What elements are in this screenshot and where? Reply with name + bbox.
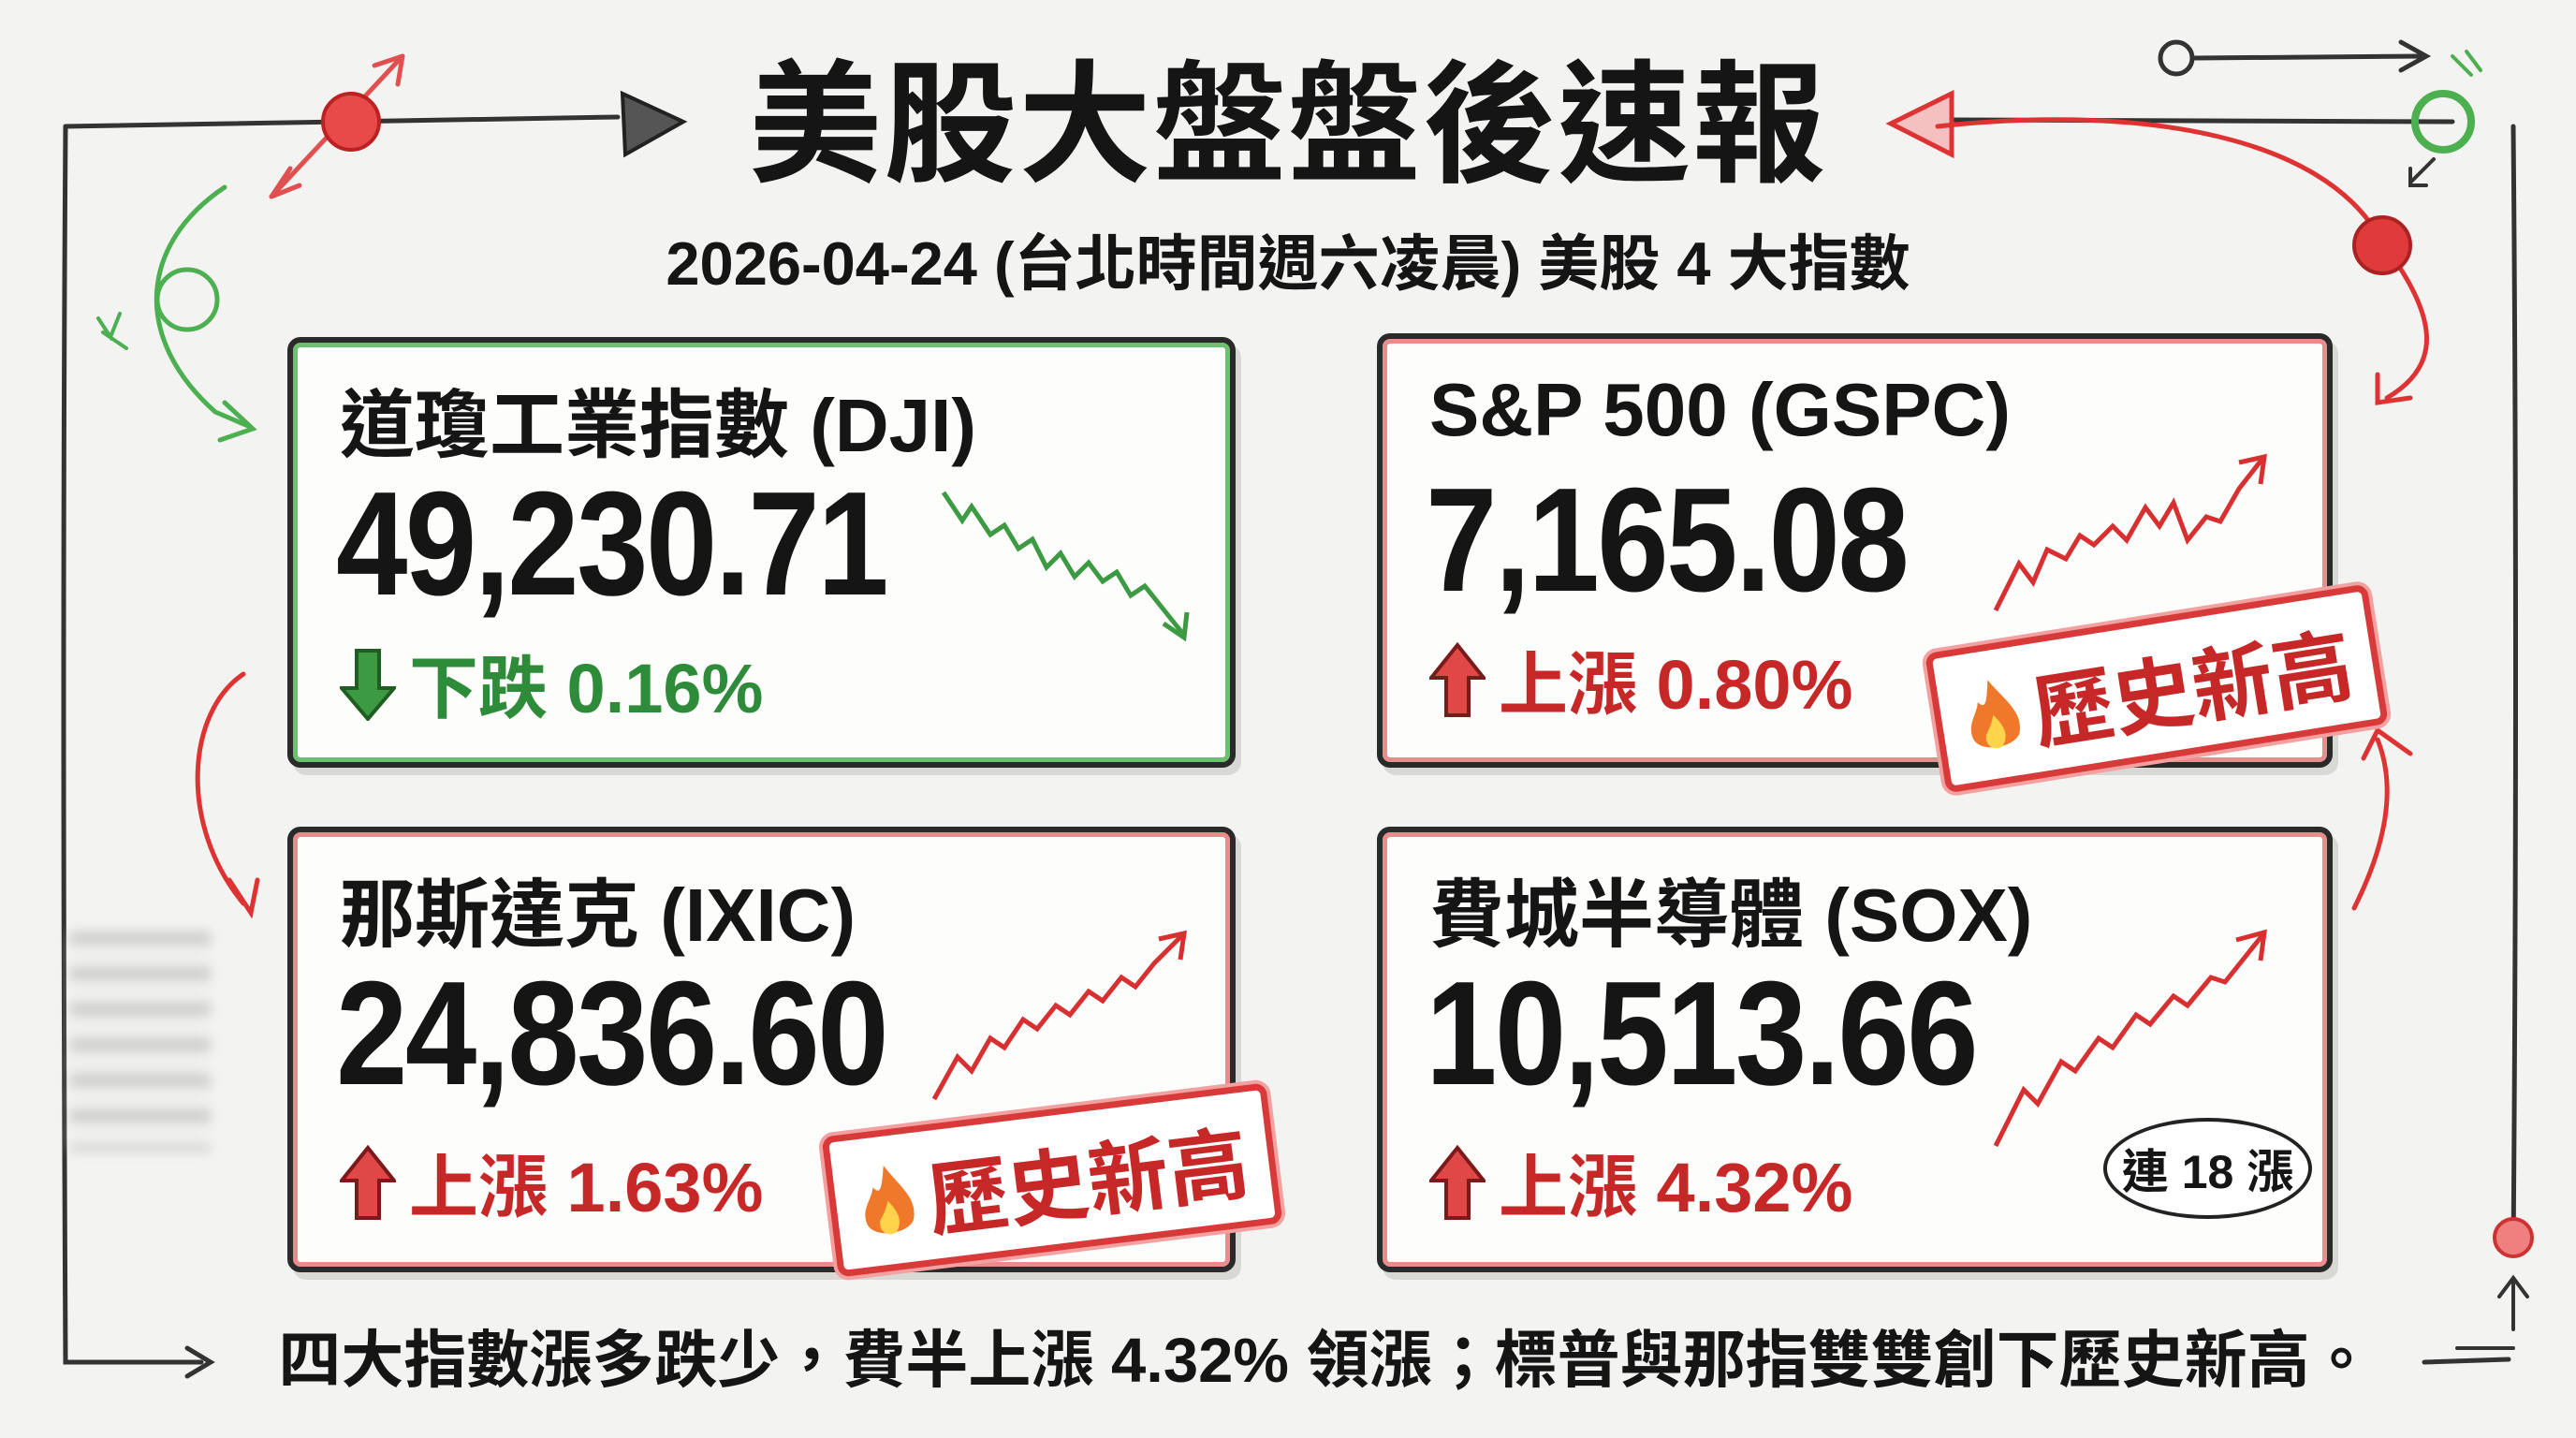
badge: SPX record high — [1925, 584, 2389, 793]
number SPX: 7,165.08 — [1426, 458, 1907, 623]
sparkline IXIC — [932, 931, 1187, 1101]
change IXIC: 上漲 1.63% — [409, 1149, 763, 1226]
sparkline SOX — [1994, 929, 2267, 1148]
badge: SPX record high: 歷史新高 — [2027, 622, 2359, 760]
heading DJI: 道瓊工業指數 (DJI) — [340, 384, 976, 467]
change SOX: 上漲 4.32% — [1499, 1149, 1852, 1226]
heading IXIC: 那斯達克 (IXIC) — [340, 873, 856, 957]
bottom summary: 四大指數漲多跌少，費半上漲 4.32% 領漲；標普與那指雙雙創下歷史新高。 — [278, 1326, 2373, 1396]
title: 美股大盤盤後速報 — [749, 51, 1827, 200]
number IXIC: 24,836.60 — [336, 951, 886, 1116]
change SPX: 上漲 0.80% — [1499, 646, 1852, 724]
badge: IXIC record high: 歷史新高 — [923, 1120, 1253, 1248]
panel: IXIC — [287, 827, 1236, 1272]
panel: S&P 500 — [1377, 333, 2333, 768]
sparkline SPX — [1994, 453, 2267, 612]
subtitle: 2026-04-24 (台北時間週六凌晨) 美股 4 大指數 — [666, 229, 1910, 298]
panel: DJI — [287, 337, 1236, 768]
number DJI: 49,230.71 — [336, 462, 886, 626]
change DJI: 下跌 0.16% — [409, 650, 763, 727]
callout: 18-day streak: 連 18 漲 — [2122, 1146, 2293, 1198]
callout: 18-day streak — [2103, 1118, 2312, 1219]
number SOX: 10,513.66 — [1426, 951, 1976, 1116]
heading SPX: S&P 500 (GSPC) — [1429, 368, 2011, 451]
badge: IXIC record high — [822, 1082, 1282, 1278]
heading SOX: 費城半導體 (SOX) — [1429, 873, 2032, 957]
sparkline DJI — [942, 491, 1189, 642]
panel: SOX — [1377, 827, 2333, 1272]
blurred side note — [70, 932, 211, 1152]
